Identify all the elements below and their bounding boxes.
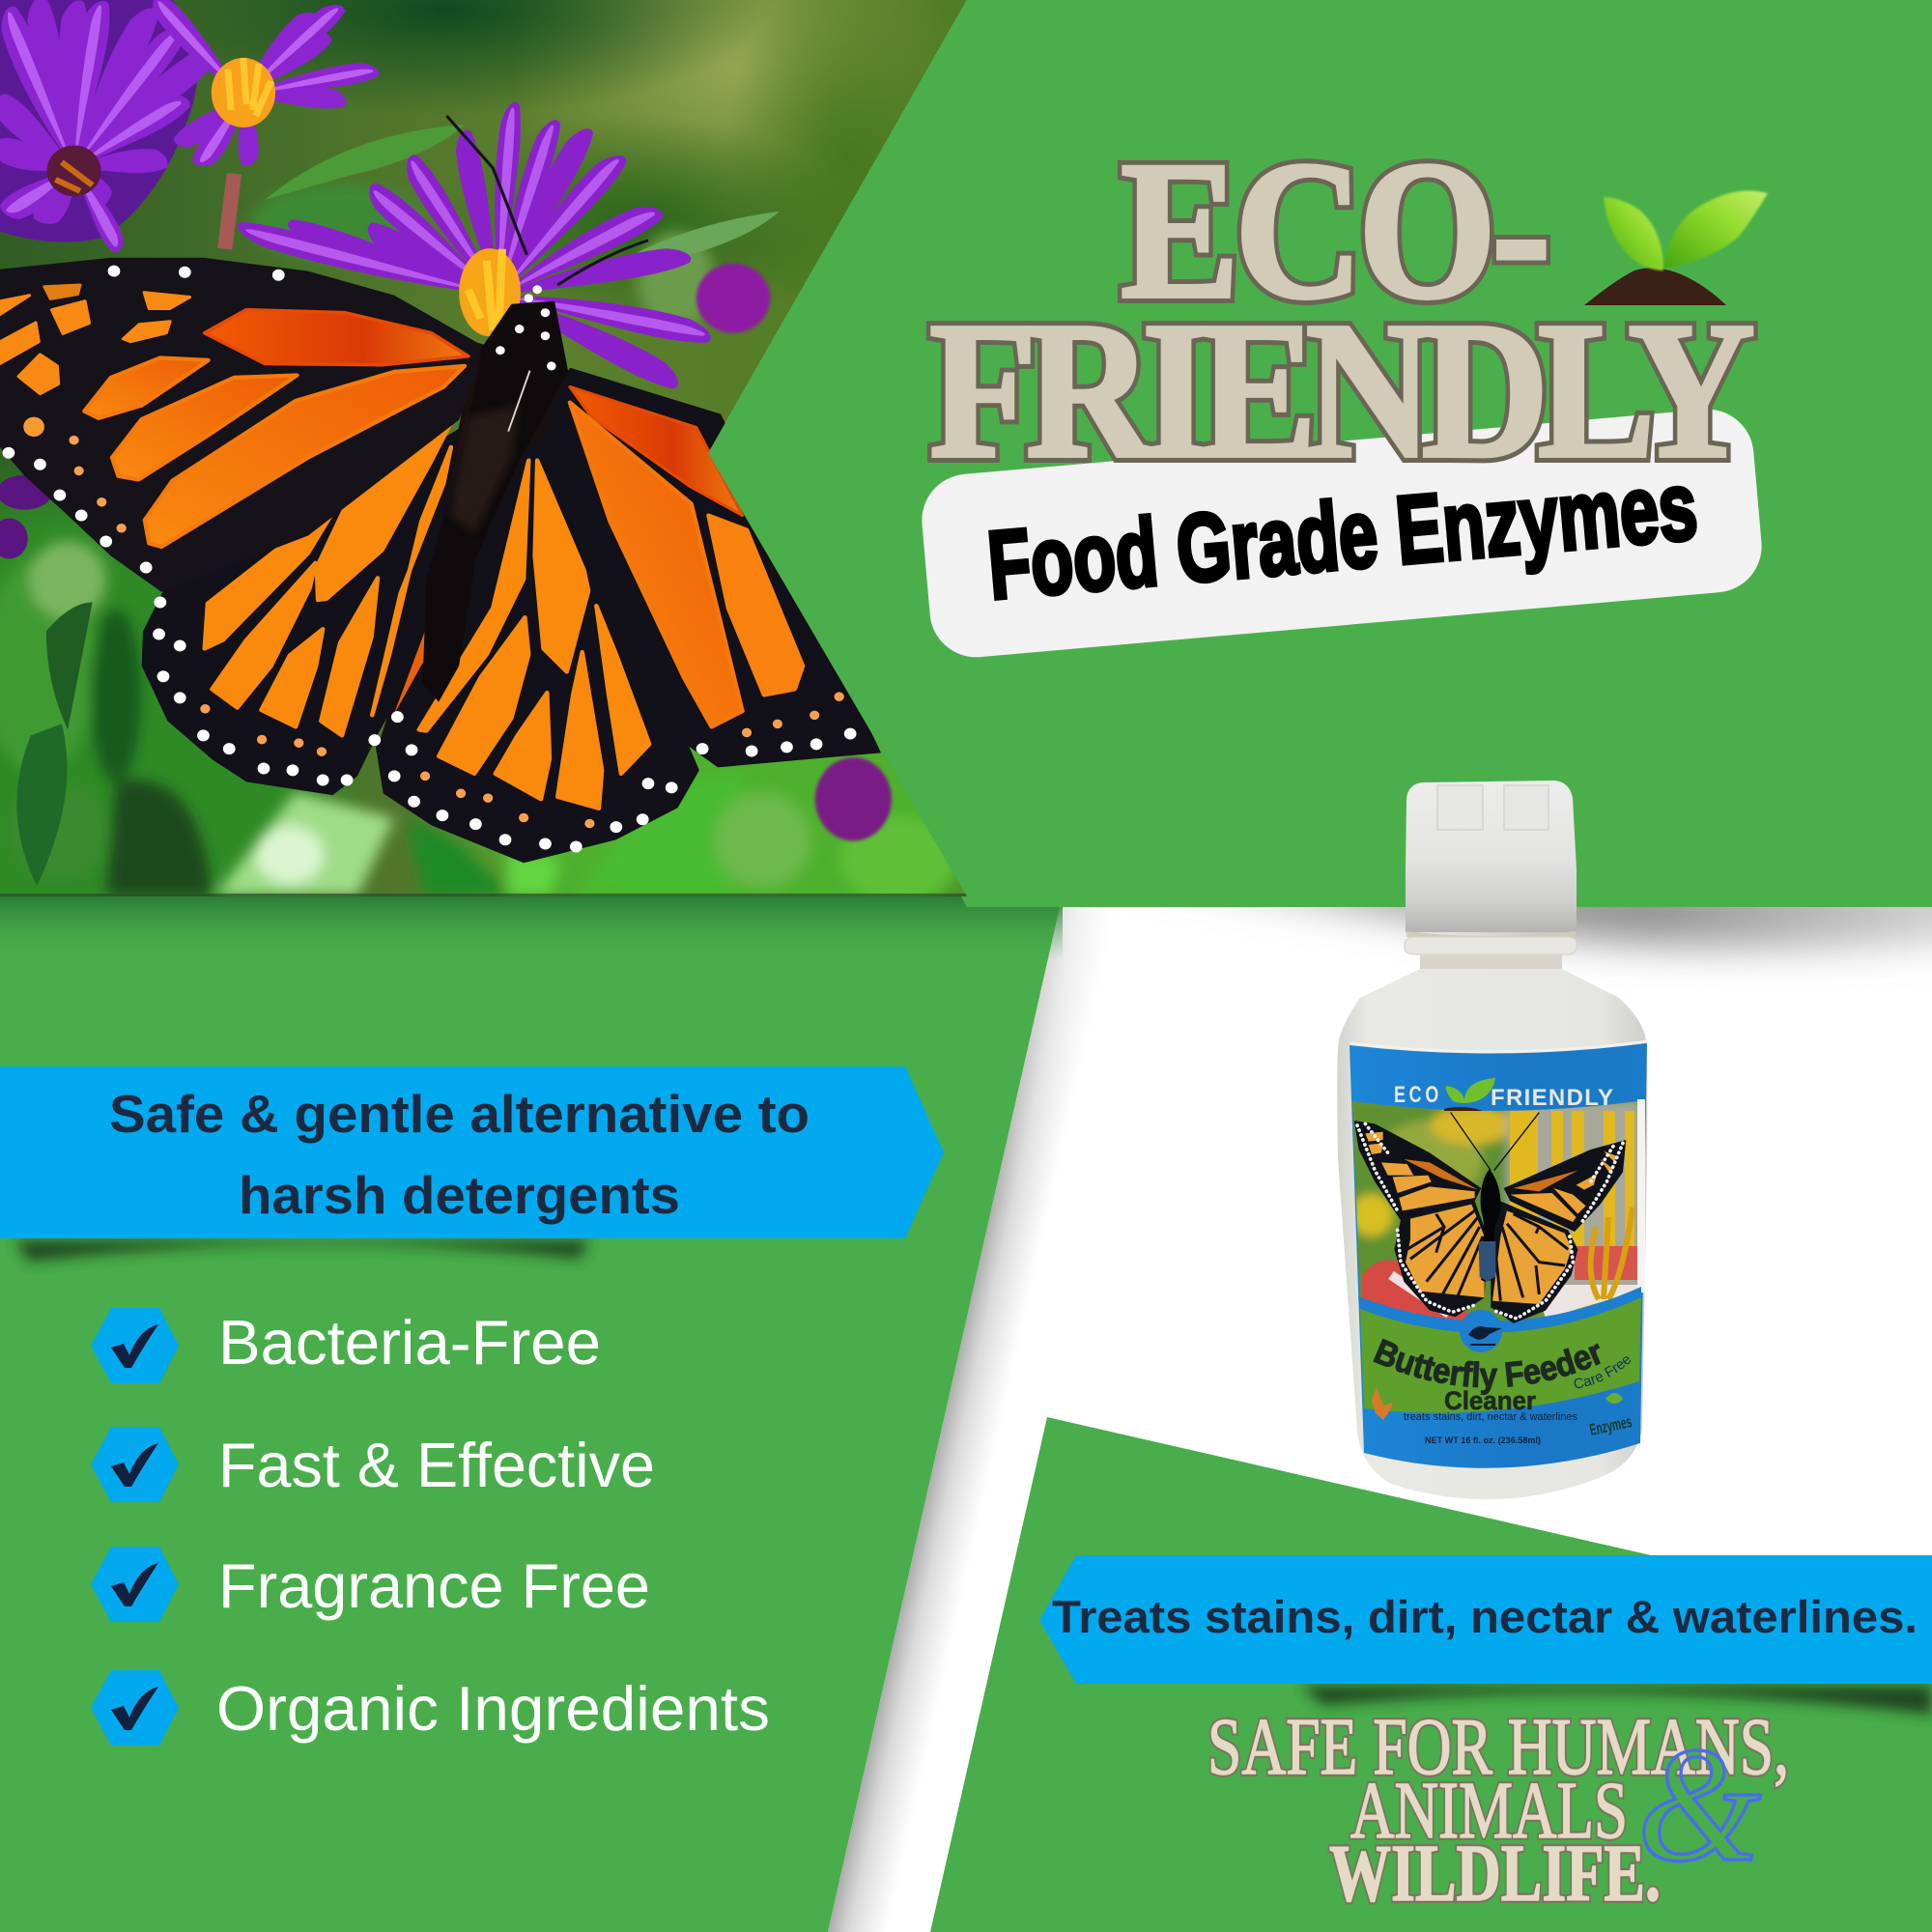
label text: eco friendly: ECO — [1394, 1082, 1442, 1108]
slogan: safe for humans, animals and wildlife: ANIMALS — [1350, 1766, 1628, 1856]
butterfly: right hindwing — [376, 429, 699, 863]
label text: product name: NET WT 16 fl. oz. (236.58ml) — [1425, 1435, 1541, 1446]
shadows cast on white panel — [828, 874, 1932, 1932]
photo: monarch butterfly on purple asters — [0, 0, 967, 896]
label text: eco friendly — [1394, 1078, 1613, 1111]
icon: sprout — [1584, 190, 1768, 305]
banner: treats stains: Treats stains, dirt, nectar & waterlines. — [1052, 1591, 1918, 1642]
banner: safe and gentle alternative — [0, 1066, 944, 1262]
flower: central aster — [234, 101, 714, 393]
ampersand script: & — [1637, 1714, 1761, 1895]
label text: product name: Butterfly Feeder — [1373, 1339, 1601, 1395]
label text: product name: Care Free — [1575, 1356, 1631, 1389]
callout: Food Grade Enzymes pill — [918, 406, 1766, 661]
title: ECO-FRIENDLY: FRIENDLY — [929, 281, 1755, 498]
label text: product name: treats stains, dirt, nectar & waterlines — [1404, 1411, 1577, 1423]
butterfly: left hindwing — [142, 423, 459, 795]
green panel: bottom right — [930, 1417, 1932, 1932]
butterfly: dark backing behind body — [376, 342, 570, 753]
butterfly: right forewing — [549, 368, 881, 767]
panel shading under photo — [0, 896, 1063, 960]
item: Bacteria-Free — [91, 1307, 601, 1383]
butterfly: left forewing — [0, 258, 477, 592]
label text: product name — [1373, 1339, 1634, 1446]
flower: top centre aster — [143, 0, 381, 249]
item: Organic Ingredients: Organic Ingredients — [216, 1673, 770, 1744]
label text: product name: Cleaner — [1444, 1386, 1536, 1415]
title: ECO-FRIENDLY: FRIENDLY — [929, 281, 1755, 498]
label butterfly — [1354, 1113, 1626, 1323]
butterfly: body and head — [423, 116, 648, 702]
title: ECO-FRIENDLY: ECO- — [1121, 121, 1551, 340]
slogan: safe for humans, animals and wildlife — [1208, 1702, 1789, 1918]
flower: small magenta thistles — [0, 264, 892, 840]
item: Fragrance Free: Fragrance Free — [218, 1550, 650, 1621]
banner: safe and gentle alternative: Safe & gentle alternative to — [109, 1084, 810, 1144]
slogan: safe for humans, animals and wildlife: WILDLIFE. — [1329, 1829, 1661, 1918]
aster leaves — [16, 125, 780, 886]
label text: eco friendly: FRIENDLY — [1491, 1085, 1613, 1111]
butterfly: wing edge spots — [9, 271, 850, 846]
flower: top left aster — [0, 0, 221, 255]
label text: product name: Enzymes — [1588, 1412, 1634, 1439]
slogan: safe for humans, animals and wildlife: WILDLIFE. — [1329, 1829, 1661, 1918]
banner: safe and gentle alternative: harsh detergents — [239, 1165, 680, 1225]
green panel: bottom left — [0, 896, 1072, 1932]
small orange butterfly on label — [1372, 1387, 1393, 1420]
title: ECO-FRIENDLY — [929, 121, 1755, 498]
banner: treats stains — [1039, 1555, 1932, 1715]
bottle body — [1337, 952, 1647, 1499]
item: Bacteria-Free: Bacteria-Free — [218, 1307, 601, 1378]
title: ECO-FRIENDLY: ECO- — [1121, 121, 1551, 340]
slogan: safe for humans, animals and wildlife: ANIMALS — [1350, 1766, 1628, 1856]
green panel: top right — [708, 0, 1932, 907]
bottle label — [1350, 1041, 1647, 1468]
checklist: product benefits — [91, 1307, 770, 1746]
bottle: Butterfly Feeder Cleaner product — [1337, 781, 1648, 1499]
item: Fast and Effective: Fast & Effective — [218, 1430, 655, 1500]
bottle cap — [1405, 781, 1577, 969]
